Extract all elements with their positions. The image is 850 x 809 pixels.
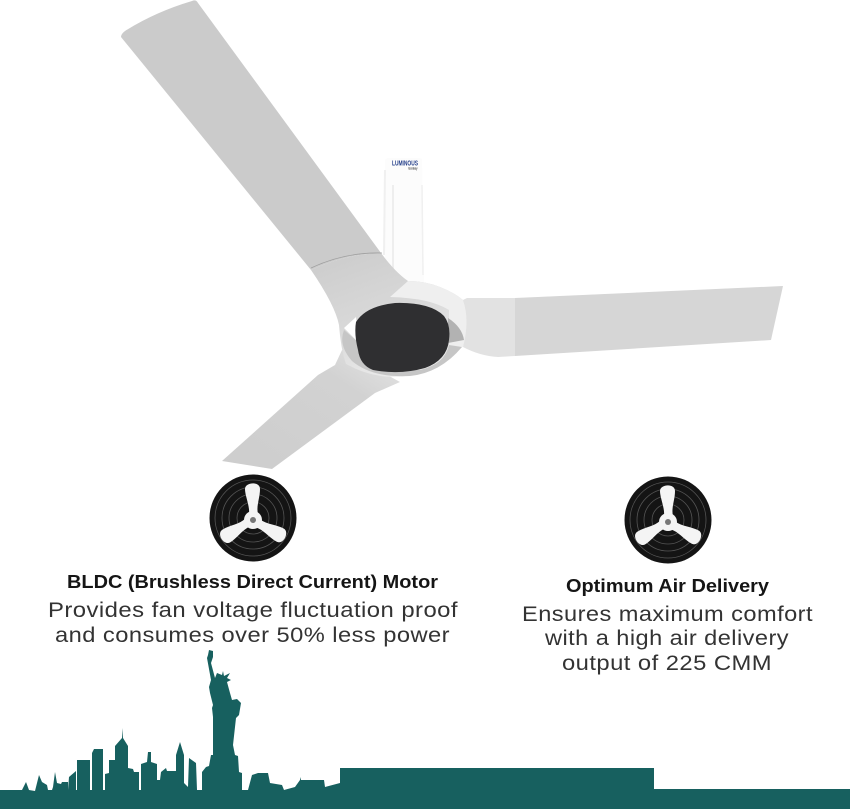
hub ring (342, 330, 462, 376)
BLDC feature text (48, 572, 458, 647)
fan downrod (384, 158, 424, 285)
air delivery description: Ensures maximum comfort (522, 603, 813, 626)
fan blade: right (515, 286, 783, 356)
fan motor cap (355, 303, 449, 372)
hub opening: white sliver (344, 317, 358, 342)
fan blade: lower left (222, 350, 400, 469)
fan blade: upper left (121, 0, 381, 270)
icon: air delivery fan (624, 476, 712, 564)
air delivery feature text (522, 576, 813, 675)
fan hub (311, 253, 515, 377)
BLDC description: and consumes over 50% less power (55, 624, 450, 647)
city skyline with Statue of Liberty (0, 650, 850, 809)
logo text: LUMINOUS (392, 160, 418, 168)
air delivery description: with a high air delivery (544, 627, 789, 650)
air delivery description: output of 225 CMM (562, 652, 772, 675)
icon: BLDC fan (210, 474, 296, 562)
ceiling fan (121, 0, 783, 469)
air delivery description (522, 603, 813, 675)
air delivery heading: Optimum Air Delivery (566, 576, 769, 596)
BLDC description: Provides fan voltage fluctuation proof (48, 599, 458, 622)
hub socket (463, 298, 515, 357)
logo text (392, 160, 418, 170)
right hub highlight (390, 281, 466, 350)
logo text: Ecstasy (408, 166, 418, 170)
BLDC description (48, 599, 458, 647)
BLDC heading: BLDC (Brushless Direct Current) Motor (67, 572, 438, 592)
hub opening: grey inner (448, 318, 464, 343)
